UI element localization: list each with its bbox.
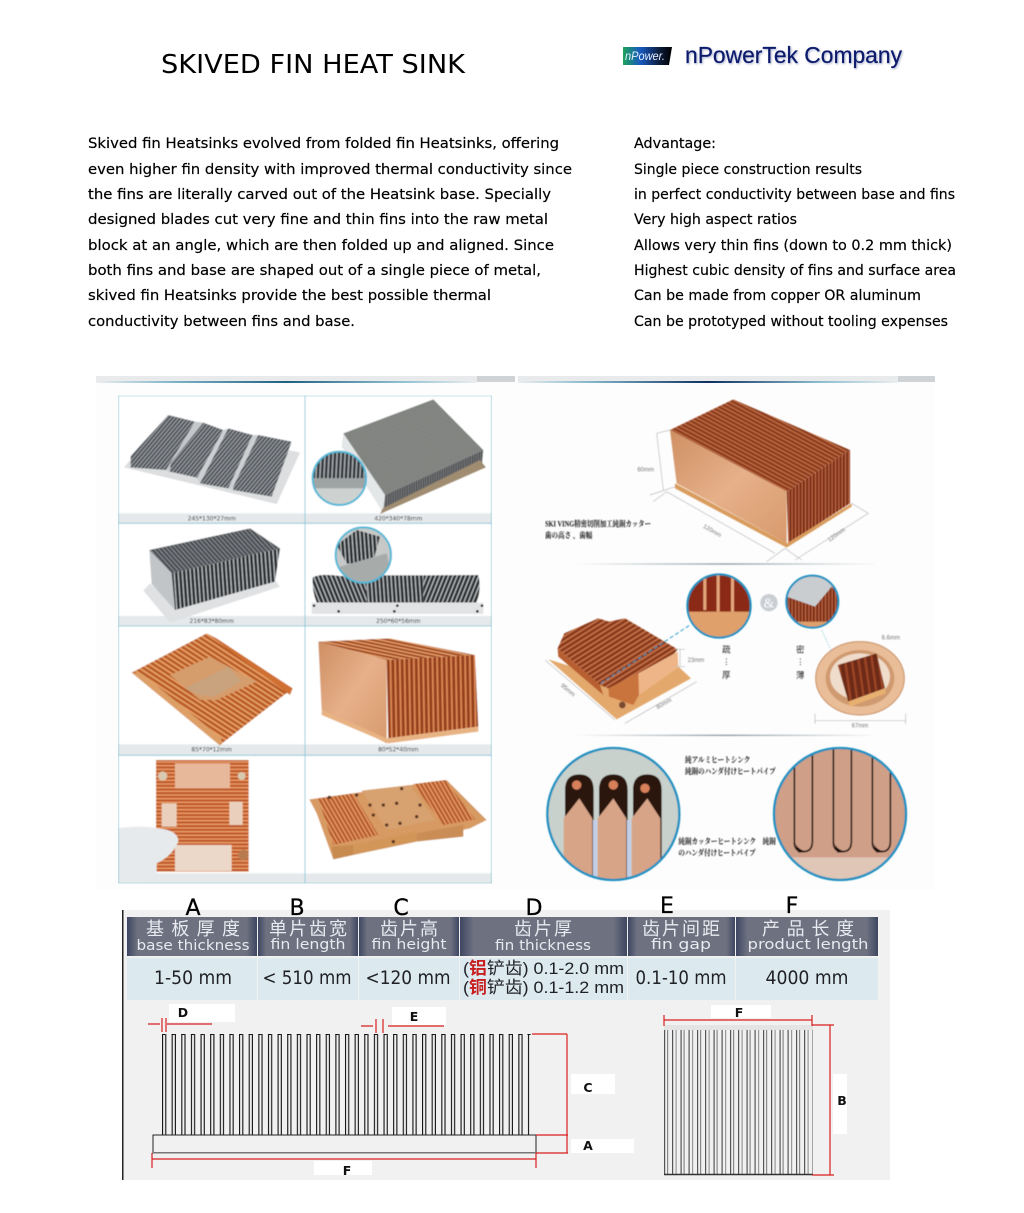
company name: nPowerTek Company — [685, 42, 902, 68]
table: values row: 4000 mm — [766, 968, 848, 989]
panel: product photo grid — [96, 376, 515, 890]
table: header row: 单片齿宽 — [269, 919, 347, 939]
dimension lines — [148, 1015, 834, 1175]
drawing label: F bottom: F — [343, 1163, 351, 1178]
photo: large copper sink with dimensions: 120mm — [702, 524, 722, 539]
intro paragraph: both fins and base are shaped out of a single piece of metal, — [88, 263, 541, 279]
labels: dense thin — [796, 645, 805, 680]
drawing label: B — [833, 1074, 847, 1134]
drawing label: A — [571, 1138, 634, 1153]
advantages list: in perfect conductivity between base and fins — [634, 187, 955, 203]
intro paragraph: conductivity between fins and base. — [88, 314, 355, 330]
company logo — [623, 42, 902, 68]
size captions: 80*52*40mm — [378, 747, 419, 754]
photo: copper plate with mounting holes — [309, 780, 487, 859]
photo: small copper sink with dimensions: 80mm — [656, 698, 673, 711]
drawing label: C — [571, 1074, 615, 1095]
labels: sparse thick — [722, 645, 731, 680]
photo: small copper sink with dimensions: 23mm — [688, 658, 704, 664]
column letters: F — [786, 894, 798, 919]
column letters: A — [185, 896, 201, 921]
drawing label: C: C — [583, 1080, 593, 1095]
labels: dense thin: 密 — [796, 645, 805, 655]
caption bands — [118, 513, 492, 883]
intro paragraph — [88, 136, 572, 330]
table: header row: 产 品 长 度 — [762, 919, 854, 939]
drawing label: A: A — [583, 1138, 593, 1153]
drawing label: B: B — [837, 1093, 847, 1108]
table: header row: fin length — [270, 937, 346, 953]
drawing label: F top — [711, 1005, 771, 1020]
labels: sparse thick: 疏 — [722, 645, 731, 655]
drawing label: F bottom — [314, 1161, 372, 1178]
photo: copper sink with center pocket — [132, 633, 293, 746]
column letters: D — [526, 896, 542, 921]
advantages list: Allows very thin fins (down to 0.2 mm thick) — [634, 238, 952, 254]
photo: small copper sink with dimensions: 95mm — [559, 683, 576, 698]
advantages list: Very high aspect ratios — [634, 212, 797, 228]
table: values row: 1-50 mm — [154, 968, 232, 989]
intro paragraph: skived fin Heatsinks provide the best possible thermal — [88, 288, 491, 304]
drawing label: D — [169, 1004, 235, 1022]
advantages list: Can be prototyped without tooling expenses — [634, 314, 948, 330]
drawing label: F top: F — [735, 1005, 743, 1020]
size captions: 216*83*80mm — [190, 618, 234, 625]
japanese caption top — [545, 519, 651, 540]
drawing: fin cross-section — [153, 1034, 536, 1154]
panel: specification table and drawings — [122, 894, 890, 1180]
japanese caption top: 歯の高さ 、歯幅 — [545, 530, 592, 540]
photo: copper ring with fins — [815, 630, 906, 730]
advantages list: Single piece construction results — [634, 162, 862, 178]
labels: dense thin: 薄 — [796, 670, 805, 680]
drawing label: E — [392, 1007, 446, 1025]
japanese caption: aluminum: 純銅のハンダ付けヒートパイプ — [685, 766, 776, 776]
drawing label: D: D — [178, 1005, 188, 1020]
ampersand badge — [760, 594, 778, 611]
photo: copper plate held in glove — [118, 760, 249, 883]
size captions — [188, 515, 423, 754]
lens: aluminum soldered heat pipes — [547, 748, 679, 883]
table: header row: 齿片间距 — [642, 919, 720, 939]
photo: tall aluminum sink — [143, 528, 280, 623]
intro paragraph: the fins are literally carved out of the Heatsink base. Specially — [88, 187, 551, 203]
table: values row — [127, 958, 878, 1000]
advantages list: Can be made from copper OR aluminum — [634, 288, 921, 304]
photo: copper ring with fins: 6.6mm — [882, 635, 900, 641]
japanese caption top: SKI VING精密切削加工純銅カッター — [545, 519, 651, 529]
japanese caption: copper: 純銅カッターヒートシンク 純銅 — [678, 836, 776, 846]
table: header row: fin thickness — [495, 938, 591, 954]
photo: curved aluminum sink with lens — [312, 527, 483, 614]
table: header row: 齿片高 — [380, 919, 438, 939]
advantages list: Advantage: — [634, 136, 716, 152]
advantages list — [634, 136, 956, 330]
table: header row: 基 板 厚 度 — [146, 919, 240, 939]
table: header row: base thickness — [136, 938, 250, 954]
size captions: 245*130*27mm — [188, 515, 236, 522]
table: header row: fin height — [372, 937, 447, 953]
japanese caption: copper — [678, 836, 776, 858]
japanese caption: copper: のハンダ付けヒートパイプ — [678, 848, 756, 858]
table: values row: (铜铲齿) 0.1-1.2 mm — [463, 978, 624, 997]
table: header row: product length — [748, 937, 868, 953]
size captions: 250*60*56mm — [376, 618, 421, 625]
photo: copper ring with fins: 67mm — [852, 724, 868, 730]
logo badge: nPower. — [625, 51, 665, 63]
photo: large copper sink with dimensions: 60mm — [637, 468, 654, 474]
photo: aluminum heat sink 245x130x27 — [124, 415, 300, 504]
intro paragraph: block at an angle, which are then folded up and aligned. Since — [88, 238, 554, 254]
lens: sparse thick fins — [685, 574, 755, 642]
size captions: 85*70*12mm — [191, 747, 232, 754]
advantages list: Highest cubic density of fins and surface area — [634, 263, 956, 279]
labels: sparse thick: 厚 — [722, 670, 731, 680]
title: SKIVED FIN HEAT SINK — [161, 50, 466, 80]
lens: dense thin fins — [786, 576, 840, 628]
table: header row — [127, 917, 878, 956]
table: header row: fin gap — [651, 937, 711, 953]
photo: copper sink with wide fins — [318, 638, 478, 743]
column letters — [185, 894, 798, 921]
labels: sparse thick: ⋮ — [722, 657, 730, 667]
drawing: top view of fins — [664, 1025, 813, 1175]
drawing label: E: E — [410, 1009, 418, 1024]
table: header row: 齿片厚 — [514, 919, 572, 939]
table: values row: < 510 mm — [262, 968, 352, 989]
logo badge — [623, 47, 672, 65]
intro paragraph: even higher fin density with improved thermal conductivity since — [88, 162, 572, 178]
japanese caption: aluminum — [685, 754, 776, 776]
japanese caption: aluminum: 純アルミヒートシンク — [685, 754, 750, 764]
intro paragraph: designed blades cut very fine and thin fins into the raw metal — [88, 212, 548, 228]
photo: small copper sink with dimensions — [545, 618, 704, 723]
size captions: 420*340*78mm — [374, 515, 423, 522]
photo: large copper sink with dimensions: 120mm — [827, 527, 847, 544]
table: values row: (铝铲齿) 0.1-2.0 mm — [463, 959, 624, 978]
panel: copper technical photos — [515, 376, 935, 890]
labels: dense thin: ⋮ — [796, 657, 804, 667]
lens: copper soldered heat pipes — [772, 748, 908, 884]
photo: large copper sink with dimensions — [637, 399, 868, 562]
table: values row: <120 mm — [366, 968, 450, 989]
column letters: E — [660, 894, 674, 919]
photo: large aluminum sink with lens — [310, 399, 486, 514]
intro paragraph: Skived fin Heatsinks evolved from folded fin Heatsinks, offering — [88, 136, 559, 152]
column letters: C — [393, 896, 409, 921]
grid frame — [118, 396, 492, 883]
column letters: B — [289, 896, 305, 921]
table: values row: 0.1-10 mm — [636, 968, 726, 989]
ampersand badge: & — [764, 595, 775, 610]
